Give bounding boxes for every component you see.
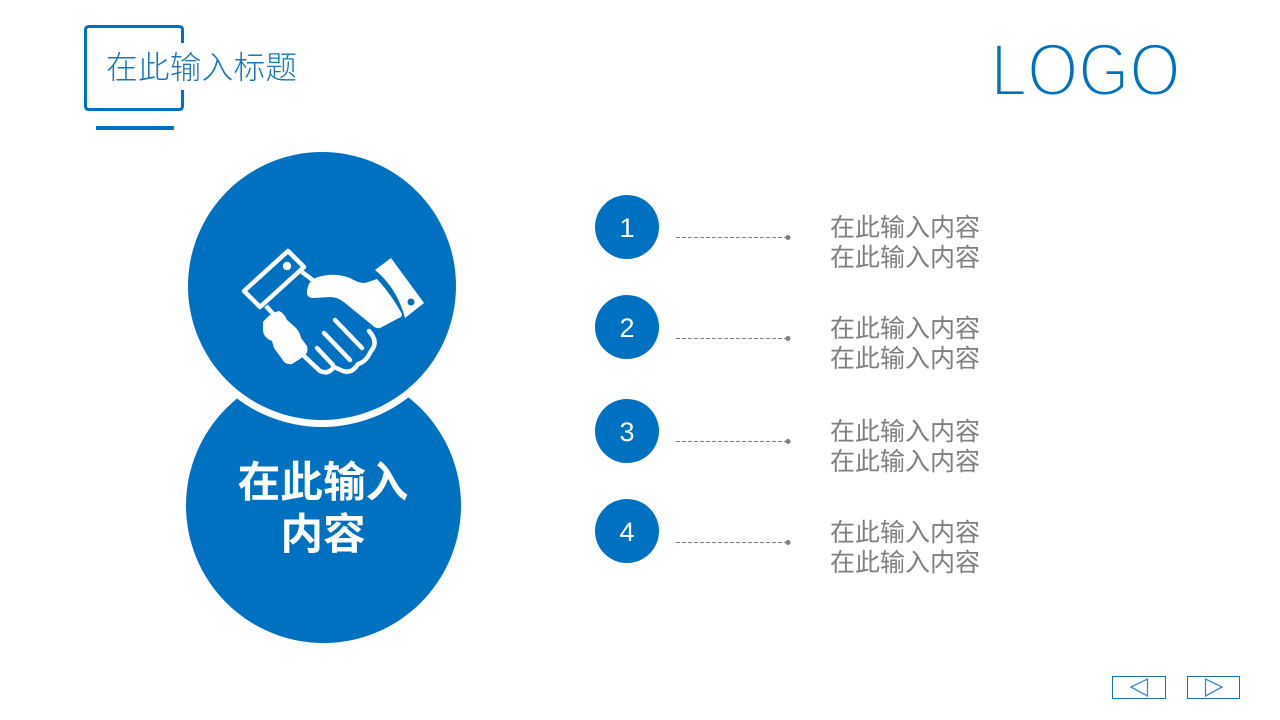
number badge 4 <box>595 499 659 563</box>
center label <box>238 459 408 559</box>
text 3: 在此输入内容 <box>830 418 980 446</box>
upper circle <box>188 152 456 420</box>
title block <box>86 26 297 130</box>
logo: LOGO <box>990 28 1180 112</box>
left fist <box>263 311 308 364</box>
number badge 1 <box>595 195 659 259</box>
list item 1: 在此输入内容 <box>830 244 980 272</box>
title text: 在此输入标题 <box>106 50 297 86</box>
list item 1: 1 <box>619 213 635 243</box>
left cuff <box>244 251 304 307</box>
list item 4: 4 <box>619 517 635 547</box>
list item 2: 在此输入内容 <box>830 345 980 373</box>
connector 1 <box>676 236 786 238</box>
title bracket frame <box>86 26 182 110</box>
text 1: 在此输入内容 <box>830 214 980 242</box>
number badge 2 <box>595 295 659 359</box>
left wrist <box>266 272 314 316</box>
list item 3 <box>595 399 980 476</box>
list item 2: 2 <box>619 313 635 343</box>
list item 2 <box>595 295 980 373</box>
text 2: 在此输入内容 <box>830 315 980 343</box>
connector 2 <box>676 338 786 340</box>
fingers <box>317 320 362 365</box>
connector 4 <box>676 542 786 544</box>
finger outline <box>305 331 375 372</box>
center label: 在此输入 <box>238 459 408 507</box>
text 4: 在此输入内容 <box>830 519 980 547</box>
icon: handshake <box>244 251 424 372</box>
list item 1 <box>595 195 980 272</box>
list item 3: 3 <box>619 417 635 447</box>
title underline <box>96 126 174 130</box>
next button <box>1188 676 1240 698</box>
right cuff <box>375 258 424 318</box>
number badge 3 <box>595 399 659 463</box>
list item 4 <box>595 499 980 577</box>
white separator ring <box>181 145 463 427</box>
previous button <box>1112 676 1166 698</box>
connector 3 <box>676 440 786 442</box>
center label: 内容 <box>280 511 366 559</box>
panel: overlapping circles <box>181 145 463 643</box>
right hand <box>307 275 402 328</box>
lower circle <box>186 368 461 643</box>
list item 3: 在此输入内容 <box>830 448 980 476</box>
list item 4: 在此输入内容 <box>830 549 980 577</box>
